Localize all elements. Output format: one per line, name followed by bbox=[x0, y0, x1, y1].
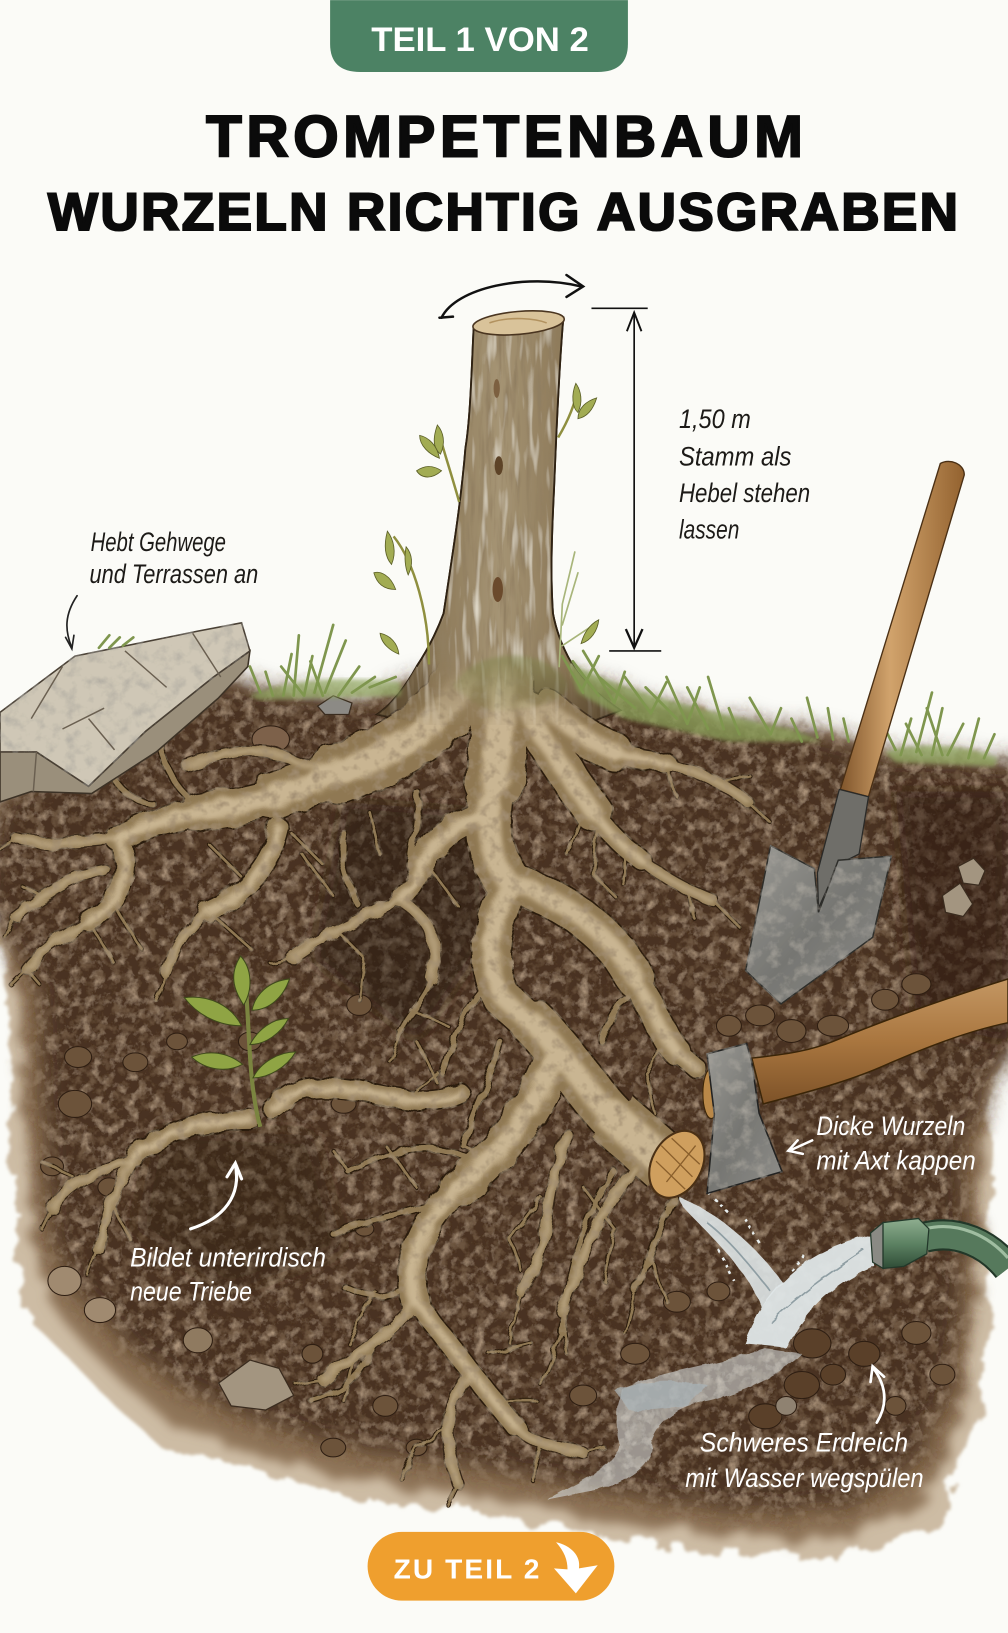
label: 1,50 m: lassen bbox=[679, 513, 739, 544]
arrow to seedling bbox=[191, 1163, 242, 1229]
label: 1,50 m bbox=[679, 403, 810, 544]
rotation arrow bbox=[439, 275, 583, 318]
header badge: Teil 1 von 2: TEIL 1 VON 2 bbox=[371, 21, 589, 59]
label: new shoots: neue Triebe bbox=[130, 1276, 252, 1307]
label: 1,50 m: 1,50 m bbox=[679, 403, 751, 434]
grass clumps bbox=[99, 552, 998, 767]
paving slab bbox=[0, 623, 250, 802]
trunk collar over roots bbox=[377, 318, 621, 725]
label: new shoots: Bildet unterirdisch bbox=[130, 1241, 326, 1272]
pebbles in soil bbox=[41, 726, 955, 1457]
water stream and pool bbox=[547, 1192, 875, 1500]
label: 1,50 m: Hebel stehen bbox=[679, 477, 810, 508]
cut root end bbox=[638, 1121, 716, 1207]
rocks bbox=[219, 696, 985, 1410]
label: pavement lifting: und Terrassen an bbox=[90, 558, 258, 589]
shovel bbox=[746, 461, 964, 1004]
label: wash soil: mit Wasser wegspülen bbox=[685, 1462, 924, 1493]
title bbox=[48, 104, 958, 242]
button: zu Teil 2 bbox=[368, 1532, 614, 1601]
button: zu Teil 2: ZU TEIL 2 bbox=[394, 1554, 539, 1585]
axe bbox=[703, 979, 1008, 1193]
header badge: Teil 1 von 2 bbox=[330, 0, 628, 72]
label: cut with axe bbox=[816, 1110, 976, 1176]
label: pavement lifting: Hebt Gehwege bbox=[91, 526, 226, 557]
tree trunk base bbox=[377, 318, 621, 725]
seedling bbox=[184, 956, 296, 1127]
arrow to soil bbox=[871, 1366, 884, 1423]
label: wash soil bbox=[685, 1427, 924, 1493]
label: pavement lifting bbox=[90, 526, 258, 589]
label: new shoots bbox=[130, 1241, 326, 1307]
height dimension line bbox=[591, 308, 661, 651]
label: cut with axe: mit Axt kappen bbox=[816, 1145, 976, 1176]
sprouts on trunk bbox=[374, 383, 599, 664]
title: TROMPETENBAUM bbox=[206, 104, 803, 169]
garden hose bbox=[871, 1218, 1008, 1268]
arrow to pavement bbox=[66, 596, 77, 649]
root system bbox=[0, 672, 771, 1505]
arrow to axe bbox=[788, 1140, 812, 1154]
title: WURZELN RICHTIG AUSGRABEN bbox=[48, 183, 958, 242]
label: wash soil: Schweres Erdreich bbox=[700, 1427, 908, 1458]
soil cross-section bbox=[0, 672, 1008, 1557]
trunk top and knots bbox=[472, 308, 565, 602]
label: cut with axe: Dicke Wurzeln bbox=[816, 1110, 965, 1141]
label: 1,50 m: Stamm als bbox=[679, 441, 791, 472]
